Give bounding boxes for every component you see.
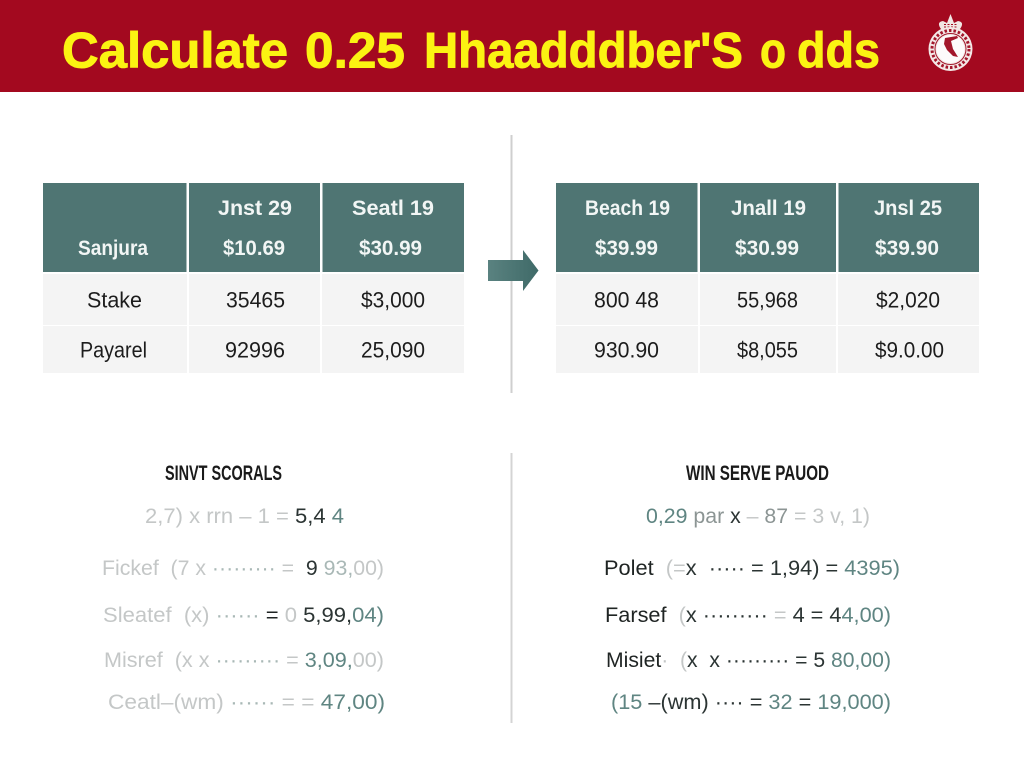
left table body: 35465 — [226, 288, 285, 312]
title: dds — [797, 22, 880, 78]
right table header: $39.90 — [875, 236, 939, 260]
panel: right table — [556, 183, 979, 373]
left calculation heading: SINVT SCORALS — [165, 462, 282, 485]
panel: left calculation — [102, 462, 385, 714]
left formula 2: Fickef (7 x ········· = 9 93,00) — [102, 557, 384, 580]
left table header — [43, 183, 464, 272]
right table body — [556, 274, 979, 373]
left table header: Jnst 29 — [218, 196, 292, 220]
left table body: 92996 — [225, 338, 285, 362]
left formula 3: Sleatef (x) ······ = 0 5,99,04) — [103, 604, 384, 627]
right table body: 800 48 — [594, 288, 659, 312]
title: Calculate — [62, 22, 288, 78]
vertical divider top — [510, 135, 512, 393]
header banner — [0, 0, 1024, 92]
left formula 1: 2,7) x rrn – 1 = 5,4 4 — [145, 505, 344, 528]
right table body: 55,968 — [737, 288, 798, 312]
right table body: $9.0.00 — [875, 338, 944, 362]
left table header: Sanjura — [78, 236, 149, 260]
right table header: Jnall 19 — [731, 196, 806, 220]
right table body: 930.90 — [594, 338, 659, 362]
left formula 5: Ceatl–(wm) ······ = = 47,00) — [108, 691, 385, 714]
left table body — [43, 274, 464, 373]
right calculation heading: WIN SERVE PAUOD — [686, 462, 829, 485]
right formula 3: Farsef (x ········· = 4 = 44,00) — [605, 604, 891, 627]
right table header: $30.99 — [735, 236, 799, 260]
right table body: $8,055 — [737, 338, 798, 362]
left table header: $30.99 — [359, 236, 422, 260]
arrow — [488, 250, 538, 291]
title: Hhaadddber'S — [424, 22, 743, 78]
left table header: $10.69 — [223, 236, 285, 260]
icon: crest emblem — [928, 14, 972, 71]
left table body: 25,090 — [361, 338, 425, 362]
left table header: Seatl 19 — [352, 196, 434, 220]
left table body: $3,000 — [361, 288, 425, 312]
right formula 1: 0,29 par x – 87 = 3 v, 1) — [646, 505, 870, 528]
right table body: $2,020 — [876, 288, 940, 312]
vertical divider bottom — [510, 453, 512, 723]
right table header: $39.99 — [595, 236, 658, 260]
left formula 4: Misref (x x ········· = 3,09,00) — [104, 649, 384, 672]
title — [62, 22, 880, 78]
left table body: Payarel — [80, 338, 147, 362]
left table body: Stake — [87, 288, 142, 312]
panel: right calculation — [604, 462, 900, 714]
right formula 2: Polet (=x ····· = 1,94) = 4395) — [604, 557, 900, 580]
right table header — [556, 183, 979, 272]
title: 0.25 — [305, 22, 405, 78]
right table header: Beach 19 — [585, 196, 670, 220]
right table header: Jnsl 25 — [874, 196, 942, 220]
panel: left table — [43, 183, 464, 373]
right formula 5: (15 –(wm) ···· = 32 = 19,000) — [611, 691, 891, 714]
right formula 4: Misiet· (x x ········· = 5 80,00) — [606, 649, 891, 672]
title: o — [760, 22, 786, 78]
